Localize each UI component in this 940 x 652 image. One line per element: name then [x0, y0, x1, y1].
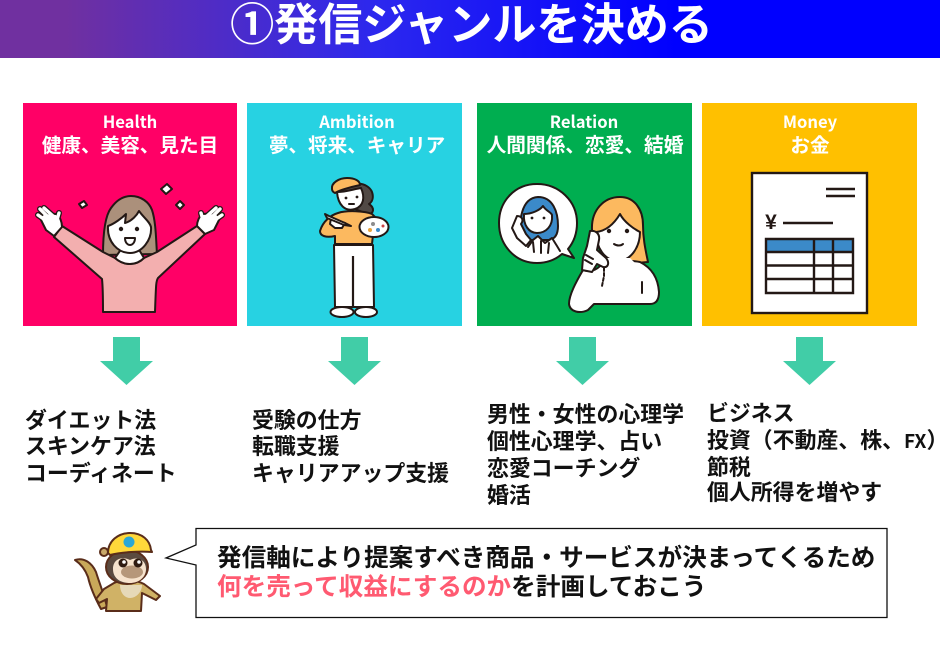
title banner	[0, 0, 940, 58]
list: Money topics	[707, 397, 940, 507]
icon: speech bubble with person on phone	[499, 184, 577, 263]
list: Ambition topics	[252, 404, 449, 488]
heading: 人間関係、恋愛、結婚: 人間関係、恋愛、結婚	[487, 129, 684, 158]
heading: お金: お金	[790, 129, 830, 158]
arrow: Relation	[556, 337, 609, 385]
list: Money topics: ビジネス	[707, 397, 795, 428]
list: Health topics: ダイエット法	[25, 404, 156, 435]
list: Relation topics: 恋愛コーチング	[487, 452, 640, 483]
list: Money topics: 節税	[707, 451, 751, 482]
heading: 夢、将来、キャリア: 夢、将来、キャリア	[269, 129, 445, 158]
icon: invoice document: ¥	[765, 211, 777, 234]
list: Health topics: コーディネート	[25, 457, 177, 488]
icon: woman on phone	[569, 197, 659, 312]
list: Ambition topics: 受験の仕方	[252, 404, 361, 435]
heading: Relation: Relation	[550, 109, 618, 133]
mascot: monkey with helmet	[75, 533, 160, 611]
list: Money topics: 個人所得を増やす	[707, 476, 882, 507]
list: Relation topics: 個性心理学、占い	[487, 425, 662, 456]
panel: Money	[702, 103, 917, 326]
list: Relation topics	[487, 398, 684, 510]
list: Relation topics: 婚活	[487, 479, 531, 510]
icon: cheerful woman	[38, 184, 222, 312]
list: Relation topics: 男性・女性の心理学	[487, 398, 684, 429]
list: Health topics: スキンケア法	[25, 430, 156, 461]
arrow: Ambition	[328, 337, 381, 385]
callout: advice speech bubble	[166, 528, 887, 618]
heading: Ambition: Ambition	[318, 109, 395, 133]
heading: Health: Health	[103, 109, 157, 133]
list: Ambition topics: 転職支援	[252, 430, 340, 461]
icon: painter woman	[320, 178, 388, 317]
panel: Relation	[477, 103, 692, 326]
panel: Ambition	[247, 103, 462, 326]
heading: Money: Money	[783, 109, 838, 133]
icon: invoice document	[752, 173, 867, 313]
arrow: Money	[783, 337, 836, 385]
heading: 健康、美容、見た目: 健康、美容、見た目	[42, 129, 218, 158]
list: Ambition topics: キャリアアップ支援	[252, 457, 449, 488]
callout: advice speech bubble: 何を売って収益にするのかを計画しておこう	[217, 567, 706, 603]
callout text: 発信軸により提案すべき商品・サービスが決まってくるため	[217, 538, 875, 574]
arrow: Health	[100, 337, 153, 385]
panel: Health	[23, 103, 237, 326]
list: Health topics	[25, 404, 177, 488]
